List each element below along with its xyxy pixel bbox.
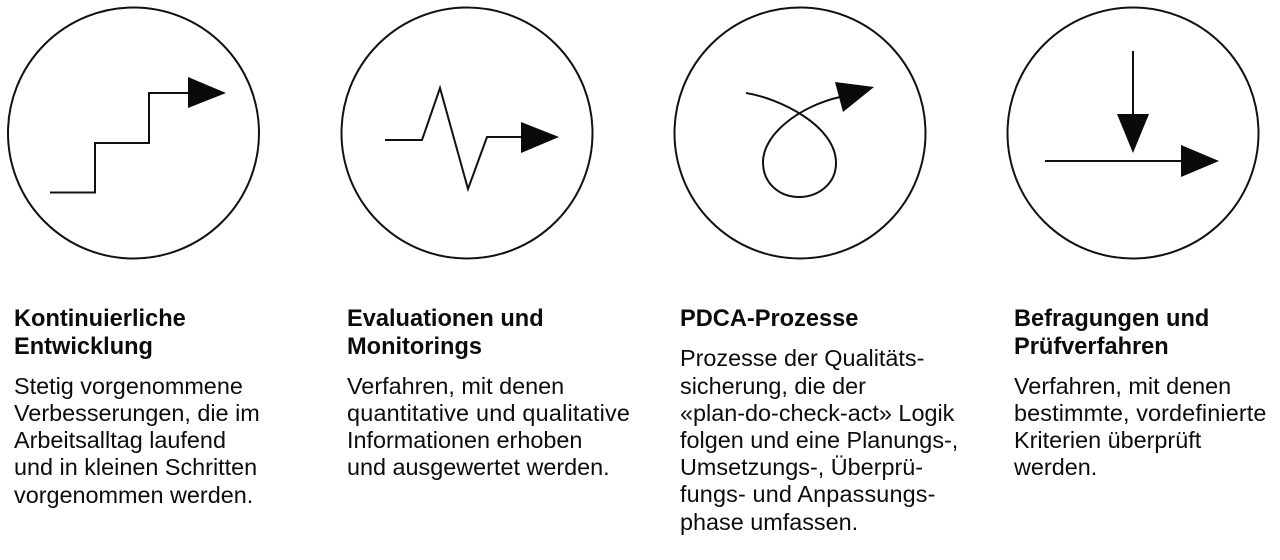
icon: stepped arrow in circle <box>8 8 259 258</box>
heading <box>347 306 544 360</box>
heading <box>14 306 186 360</box>
text block: Arbeitsalltag laufend <box>14 427 226 453</box>
text block: Verfahren, mit denen <box>347 373 564 399</box>
column: PDCA-Prozesse <box>680 306 958 535</box>
text block: Umsetzungs-, Überprü- <box>680 454 923 480</box>
text block: und ausgewertet werden. <box>347 454 610 480</box>
text block: phase umfassen. <box>680 509 858 535</box>
text block <box>1014 373 1266 480</box>
icon: fluctuating arrow in circle <box>342 8 592 258</box>
text block: und in kleinen Schritten <box>14 454 257 480</box>
text block: «plan-do-check-act» Logik <box>680 400 954 426</box>
column: Befragungen und Prüfverfahren <box>1014 306 1266 480</box>
text block: Prozesse der Qualitäts- <box>680 345 924 371</box>
heading: PDCA-Prozesse <box>680 306 858 332</box>
text block: Kriterien überprüft <box>1014 427 1201 453</box>
text block: Stetig vorgenommene <box>14 373 243 399</box>
icons row <box>7 6 1260 260</box>
text block <box>680 345 958 535</box>
heading: Prüfverfahren <box>1014 334 1169 360</box>
text block: sicherung, die der <box>680 372 866 398</box>
heading: Evaluationen und <box>347 306 544 332</box>
icon: loop arrow in circle <box>674 8 926 258</box>
text block: Verfahren, mit denen <box>1014 373 1231 399</box>
text block: fungs- und Anpassungs- <box>680 481 936 507</box>
text block: Informationen erhoben <box>347 427 582 453</box>
text block: quantitative und qualitative <box>347 400 630 426</box>
heading: Monitorings <box>347 334 482 360</box>
text block: folgen und eine Planungs-, <box>680 427 958 453</box>
text block: bestimmte, vordefinierte <box>1014 400 1266 426</box>
text block: werden. <box>1014 454 1097 480</box>
text block <box>347 373 630 480</box>
text block: vorgenommen werden. <box>14 482 253 508</box>
text block: Verbesserungen, die im <box>14 400 260 426</box>
heading: Kontinuierliche <box>14 306 186 332</box>
icon: crossing arrows in circle <box>1008 8 1258 258</box>
heading <box>1014 306 1209 360</box>
heading: Entwicklung <box>14 334 153 360</box>
column: Kontinuierliche Entwicklung <box>14 306 260 508</box>
column: Evaluationen und Monitorings <box>347 306 630 480</box>
heading: Befragungen und <box>1014 306 1209 332</box>
text block <box>14 373 260 508</box>
